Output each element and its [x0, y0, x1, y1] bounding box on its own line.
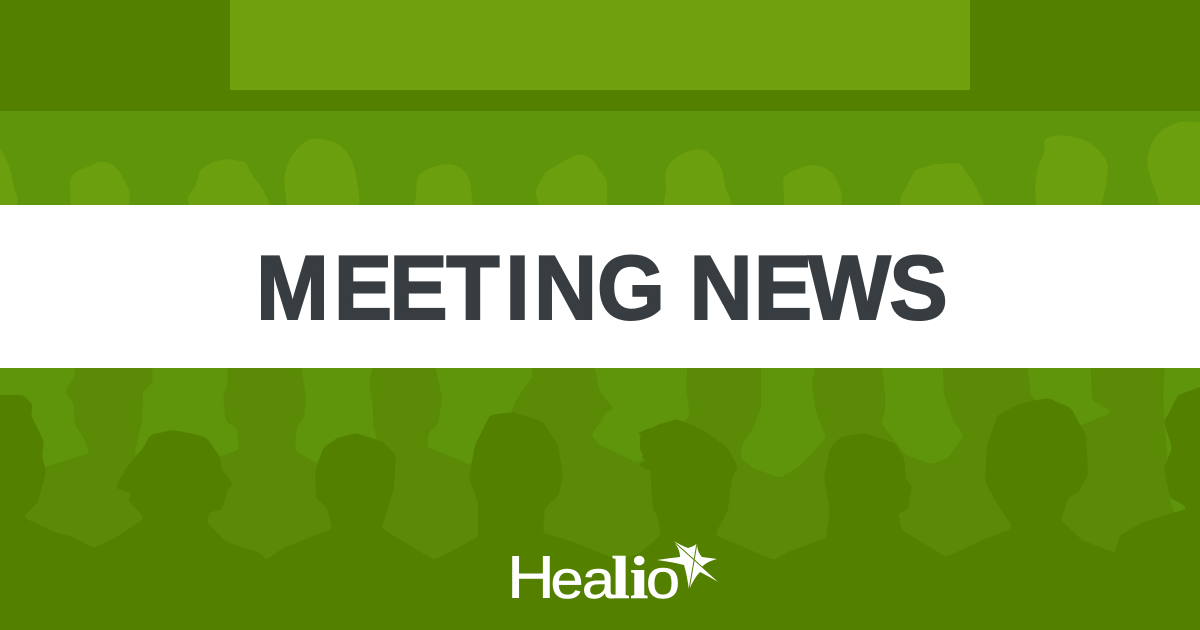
back audience row silhouettes: [0, 350, 1200, 630]
white title band: [0, 205, 1200, 368]
background wall: [0, 0, 1200, 111]
logo star: [657, 540, 720, 590]
spiky hair detail: [638, 428, 652, 472]
logo wordmark: H: [507, 545, 555, 611]
logo wordmark: o: [646, 549, 680, 610]
front audience row silhouettes: [0, 380, 1200, 630]
Healio logo: [507, 540, 720, 611]
logo wordmark: ea: [551, 550, 615, 610]
far audience row silhouettes: [0, 122, 1200, 216]
logo wordmark: li: [611, 545, 648, 611]
projection screen: [230, 0, 970, 90]
title: MEETING NEWS: [256, 236, 948, 338]
